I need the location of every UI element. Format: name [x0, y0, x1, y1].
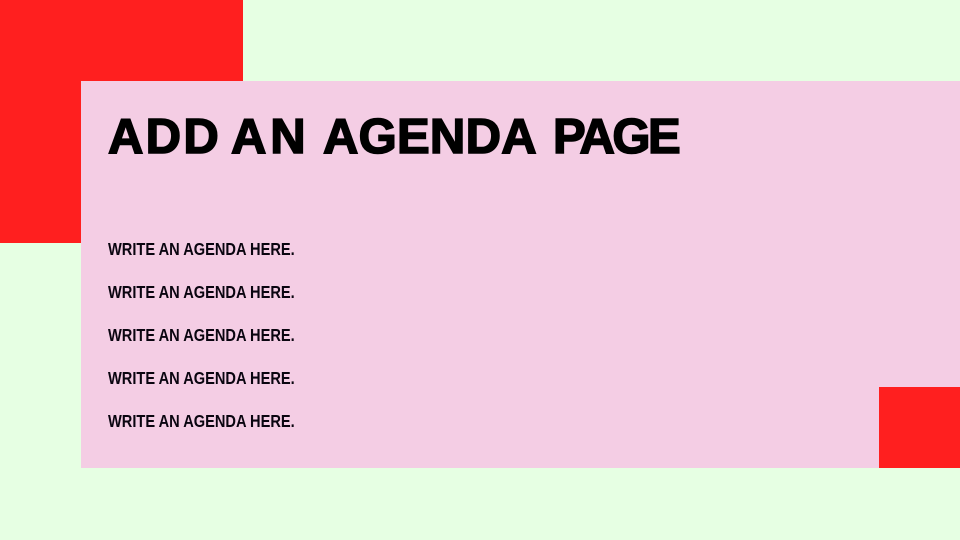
title: AN	[231, 110, 309, 164]
title: PAGE	[553, 110, 678, 164]
agenda item 1: WRITE AN AGENDA HERE.	[108, 239, 295, 259]
red square: bottom right	[879, 387, 960, 468]
red square: top left	[0, 0, 243, 243]
title	[108, 110, 680, 164]
panel: agenda	[81, 81, 960, 468]
agenda item 3: WRITE AN AGENDA HERE.	[108, 325, 295, 345]
agenda item 4: WRITE AN AGENDA HERE.	[108, 368, 295, 388]
title: ADD	[108, 110, 221, 164]
agenda item 5: WRITE AN AGENDA HERE.	[108, 411, 295, 431]
title: AGENDA	[323, 110, 537, 164]
agenda item 2: WRITE AN AGENDA HERE.	[108, 282, 295, 302]
